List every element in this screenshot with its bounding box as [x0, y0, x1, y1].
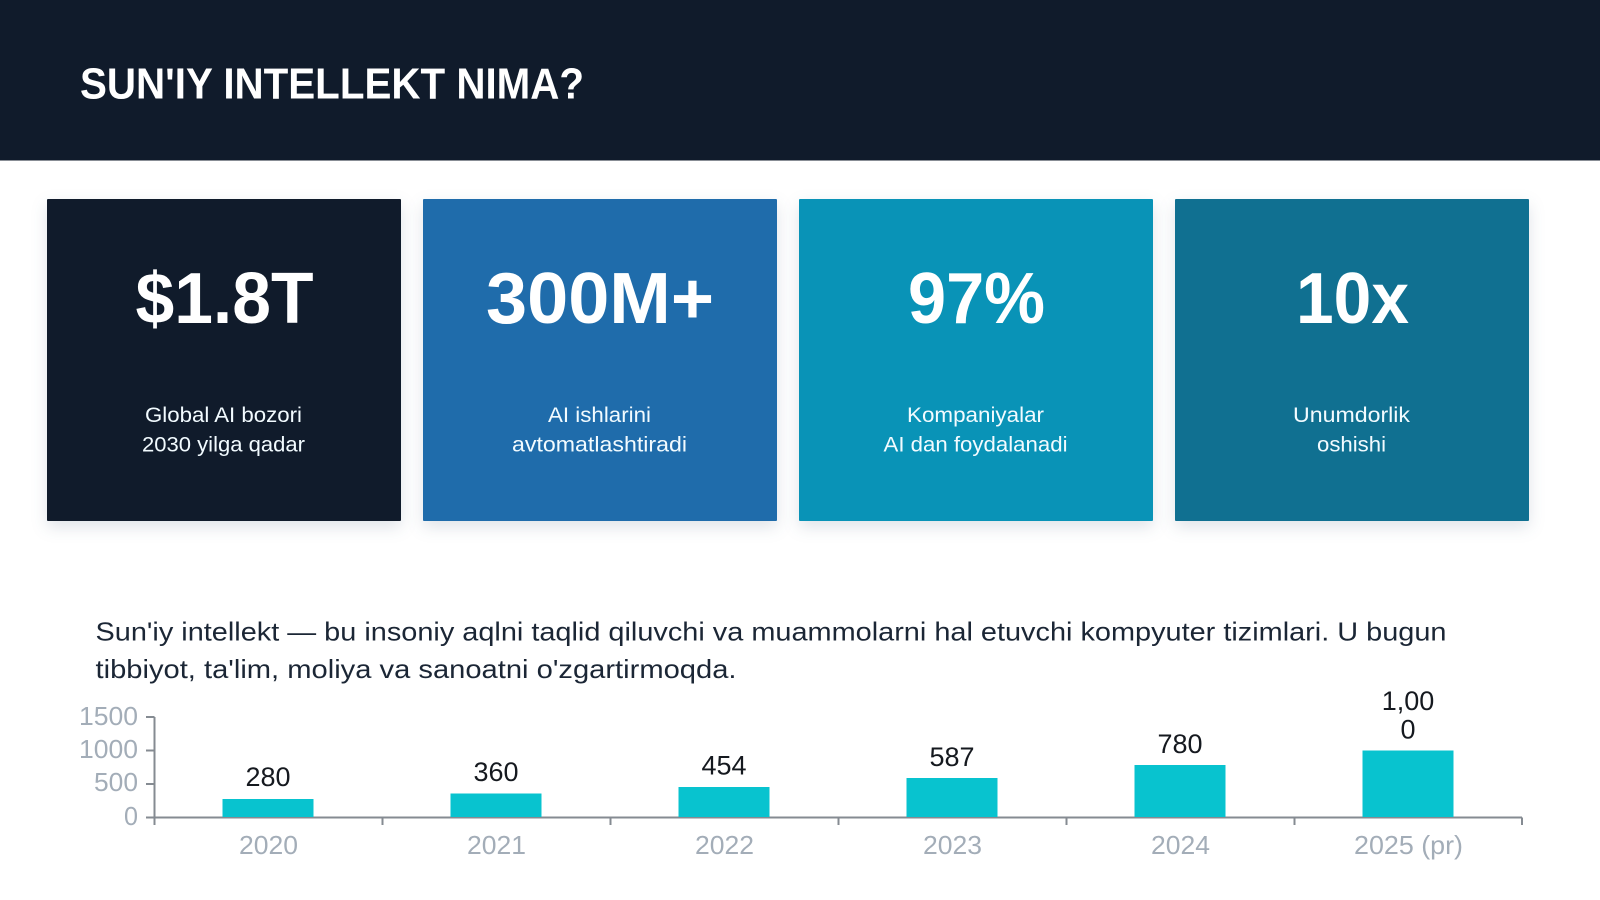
- panel: stat card global AI market: [47, 199, 401, 521]
- bar value labels: 280: [245, 762, 291, 792]
- x axis labels: [239, 830, 1463, 860]
- panel: stat card productivity: [1175, 199, 1529, 521]
- x axis labels: 2021: [467, 830, 526, 860]
- description text: tibbiyot, ta'lim, moliya va sanoatni o'zgartirmoqda.: [96, 654, 736, 684]
- bar value labels: 1,00: [1382, 686, 1434, 716]
- x axis labels: 2023: [923, 830, 982, 860]
- stat number: 300M+: [486, 259, 714, 339]
- description text: Sun'iy intellekt — bu insoniy aqlni taqlid qiluvchi va muammolarni hal etuvchi kompyuter tizimlari. U bugun: [96, 616, 1446, 646]
- stat label: oshishi: [1317, 434, 1386, 456]
- x axis labels: 2022: [695, 830, 754, 860]
- panel: stat card jobs automated: [423, 199, 777, 521]
- bar chart: [79, 686, 1522, 860]
- stat label: avtomatlashtiradi: [512, 434, 687, 456]
- stat number: 10x: [1296, 259, 1409, 339]
- stat label: Kompaniyalar: [907, 404, 1044, 427]
- bar value labels: [245, 686, 1434, 792]
- y axis labels: 1000: [79, 734, 138, 764]
- stat number: $1.8T: [136, 259, 314, 339]
- y axis labels: 0: [124, 801, 138, 831]
- stat label: Global AI bozori: [145, 404, 302, 427]
- x axis labels: 2025 (pr): [1354, 830, 1463, 860]
- bar value labels: 780: [1157, 729, 1203, 759]
- stat label: Unumdorlik: [1293, 404, 1411, 427]
- x axis labels: 2020: [239, 830, 298, 860]
- y axis labels: 1500: [79, 701, 138, 731]
- x axis labels: 2024: [1151, 830, 1210, 860]
- bar value labels: 360: [473, 757, 519, 787]
- bars: [222, 750, 1454, 817]
- stat number: 97%: [908, 259, 1045, 339]
- bar value labels: 587: [929, 742, 975, 772]
- stat label: AI ishlarini: [548, 404, 651, 427]
- y axis labels: 500: [94, 767, 138, 797]
- panel: stat card companies using AI: [799, 199, 1153, 521]
- bar value labels: 454: [701, 750, 747, 780]
- header band: [0, 0, 1600, 160]
- bar value labels: 0: [1400, 714, 1416, 744]
- y axis labels: [79, 701, 138, 831]
- stat label: AI dan foydalanadi: [884, 434, 1068, 456]
- title: SUN'IY INTELLEKT NIMA?: [80, 60, 584, 108]
- stat label: 2030 yilga qadar: [142, 434, 305, 456]
- chart axes: [146, 717, 1522, 825]
